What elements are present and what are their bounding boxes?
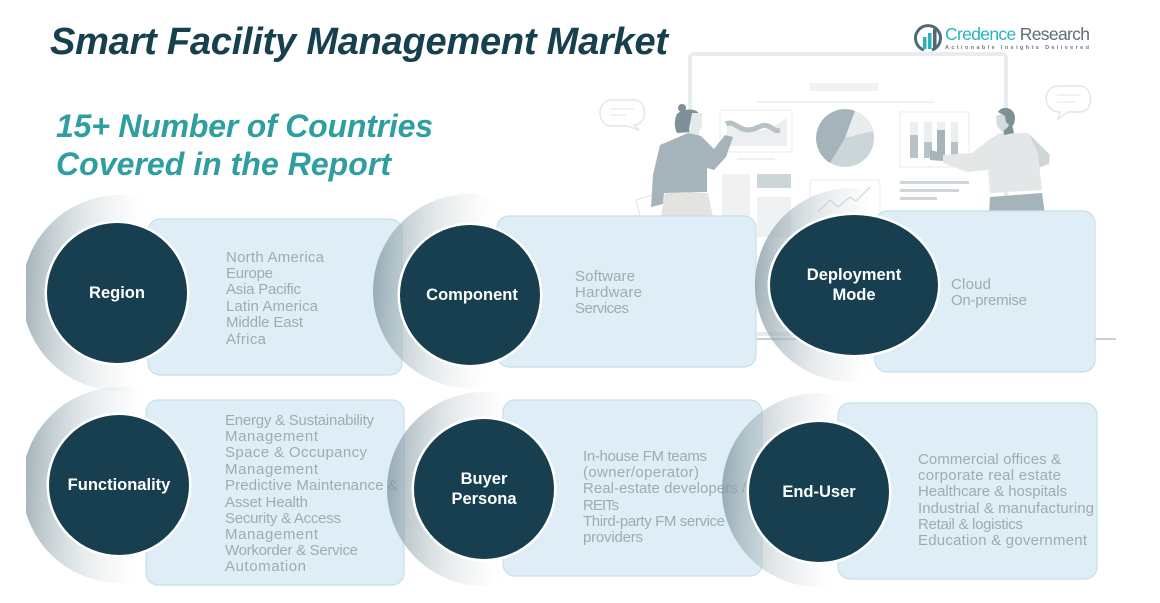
monitor frame [690, 54, 1006, 334]
panel: end-user: Healthcare & hospitals [918, 483, 1067, 500]
logo icon [915, 26, 940, 50]
panel: region: Asia Pacific [226, 281, 302, 298]
panel: component: Hardware [575, 284, 642, 301]
panel: deployment mode [755, 188, 1095, 382]
panel: functionality: Functionality [68, 476, 171, 494]
panel: region: Europe [226, 265, 273, 282]
logo tagline: Actionable Insights Delivered [945, 45, 1089, 51]
panel: deployment mode: Mode [832, 286, 876, 304]
speech bubble right [1046, 86, 1090, 119]
panel: buyer persona: Real-estate developers / [583, 480, 747, 497]
panel: end-user: Industrial & manufacturing [918, 500, 1094, 517]
area chart card [720, 110, 792, 160]
panel: region: Middle East [226, 314, 304, 331]
panel: buyer persona: In-house FM teams [583, 448, 707, 465]
panel: buyer persona: Third-party FM service [583, 513, 725, 530]
panel: end-user: corporate real estate [918, 467, 1061, 484]
panel: region: Africa [226, 331, 267, 348]
panel: region: Latin America [226, 298, 319, 315]
panel: region [22, 195, 402, 391]
panel: functionality: Asset Health [225, 494, 308, 511]
pie chart [816, 109, 874, 167]
panel: functionality: Security & Access [225, 510, 341, 527]
subtitle: Covered in the Report [56, 146, 392, 182]
panel: component [373, 194, 756, 388]
baseline [755, 338, 1116, 340]
panel: functionality: Management [225, 428, 319, 445]
panel: component: Software [575, 268, 635, 285]
title: Smart Facility Management Market [50, 21, 669, 63]
panel: end-user: Retail & logistics [918, 516, 1023, 533]
panel: end-user: Education & government [918, 532, 1088, 549]
panel: functionality: Management [225, 526, 319, 543]
small charts and lines [722, 174, 969, 237]
subtitle: 15+ Number of Countries [56, 108, 433, 144]
panel: end-user: Commercial offices & [918, 451, 1061, 468]
panel: buyer persona [387, 392, 762, 586]
bar chart card [900, 112, 969, 167]
panel: region: Region [89, 284, 145, 302]
background illustration [600, 54, 1116, 340]
panel: deployment mode: Deployment [807, 266, 902, 284]
panel: deployment mode: Cloud [951, 276, 991, 293]
subtitle [56, 108, 433, 182]
logo [915, 24, 1090, 51]
panel: buyer persona: providers [583, 529, 643, 546]
panel: buyer persona: REITs [583, 497, 619, 514]
panel: functionality [22, 387, 404, 585]
panel: component: Services [575, 300, 629, 317]
speech bubble left [600, 100, 644, 130]
panel: functionality: Space & Occupancy [225, 444, 368, 461]
panel: functionality: Automation [225, 558, 306, 575]
panel: end-user: End-User [782, 483, 856, 501]
panel: deployment mode: On-premise [951, 292, 1027, 309]
panel: component: Component [426, 286, 518, 304]
panel: buyer persona: Buyer [461, 470, 508, 488]
panel: functionality: Predictive Maintenance & [225, 477, 398, 494]
panel: functionality: Management [225, 461, 319, 478]
panel: functionality: Workorder & Service [225, 542, 358, 559]
panel: buyer persona: Persona [451, 490, 517, 508]
woman presenter [636, 104, 733, 217]
panel: region: North America [226, 249, 325, 266]
logo name: Credence Research [945, 24, 1090, 44]
panel: end-user [722, 393, 1097, 587]
panel: functionality: Energy & Sustainability [225, 412, 374, 429]
man presenter [930, 108, 1050, 215]
panel: buyer persona: (owner/operator) [583, 464, 699, 481]
